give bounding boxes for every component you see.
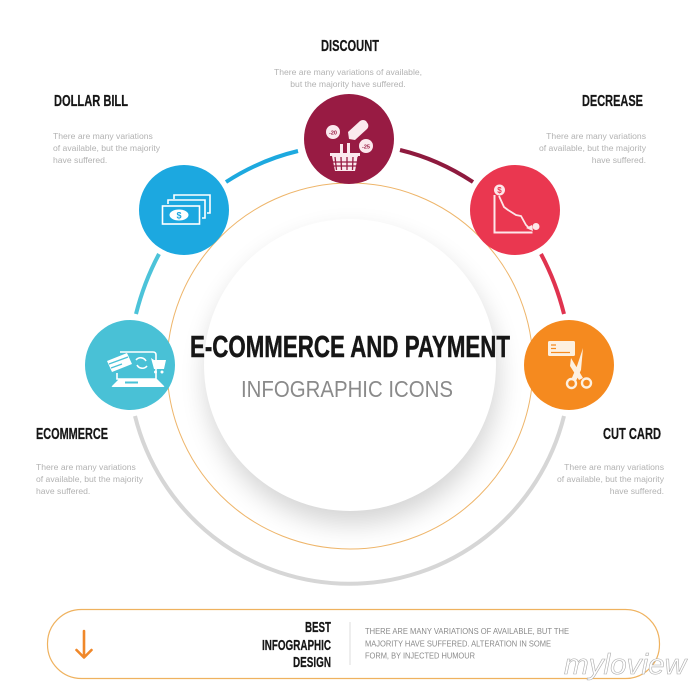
step: dollar bill [53, 93, 229, 255]
description: ecommerce: have suffered. [36, 486, 90, 496]
badge: cut card [524, 320, 614, 410]
badge: decrease [470, 165, 560, 255]
description: discount: There are many variations of available, [274, 67, 422, 77]
outer ring segments [135, 150, 564, 584]
icon: scissors cutting card [548, 341, 591, 388]
description: dollar bill: There are many variations [53, 131, 153, 141]
heading: decrease: DECREASE [582, 93, 643, 110]
description: cut card: have suffered. [610, 486, 664, 496]
center disc with shadow [204, 219, 498, 524]
description: cut card: of available, but the majority [557, 474, 665, 484]
icon: shopping basket with price tags [326, 120, 373, 171]
description: ecommerce: of available, but the majority [36, 474, 144, 484]
footer heading: DESIGN [293, 655, 331, 671]
heading: discount: DISCOUNT [321, 38, 379, 55]
icon: falling chart [494, 195, 532, 232]
footer description: FORM, BY INJECTED HUMOUR [365, 652, 475, 660]
badge: dollar bill [139, 165, 229, 255]
subtitle: INFOGRAPHIC ICONS [241, 376, 453, 402]
step: discount [274, 38, 422, 184]
step: ecommerce [36, 320, 175, 496]
description: decrease: of available, but the majority [539, 143, 647, 153]
badge: discount [304, 94, 394, 184]
footer description [365, 627, 569, 660]
step: cut card [524, 320, 665, 496]
icon: down arrow [76, 631, 92, 658]
icon: stack of bills [162, 195, 210, 224]
footer description: THERE ARE MANY VARIATIONS OF AVAILABLE, BUT THE [365, 627, 569, 636]
heading: dollar bill: DOLLAR BILL [54, 93, 128, 110]
description: decrease: have suffered. [592, 155, 646, 165]
icon: laptop with card and cart [107, 352, 166, 387]
footer heading: BEST [305, 620, 331, 636]
footer description: MAJORITY HAVE SUFFERED. ALTERATION IN SOME [365, 640, 551, 648]
description: discount: but the majority have suffered. [290, 79, 406, 89]
description: dollar bill: of available, but the majority [53, 143, 161, 153]
heading: ecommerce: ECOMMERCE [36, 426, 108, 443]
orange inner ring [167, 183, 533, 549]
description: dollar bill: have suffered. [53, 155, 107, 165]
step: decrease [470, 93, 647, 255]
badge: ecommerce [85, 320, 175, 410]
watermark: myloview [564, 649, 688, 681]
footer panel [48, 610, 660, 678]
footer heading: INFOGRAPHIC [262, 638, 331, 654]
description: ecommerce: There are many variations [36, 462, 136, 472]
description: cut card: There are many variations [564, 462, 664, 472]
title: E-COMMERCE AND PAYMENT [190, 329, 510, 364]
footer heading [262, 620, 331, 671]
step: decrease: $ [497, 186, 502, 195]
step: discount: -25 [362, 144, 370, 150]
heading: cut card: CUT CARD [603, 426, 661, 443]
step: discount: -20 [329, 130, 337, 136]
description: decrease: There are many variations [546, 131, 646, 141]
step: dollar bill: $ [176, 210, 182, 220]
